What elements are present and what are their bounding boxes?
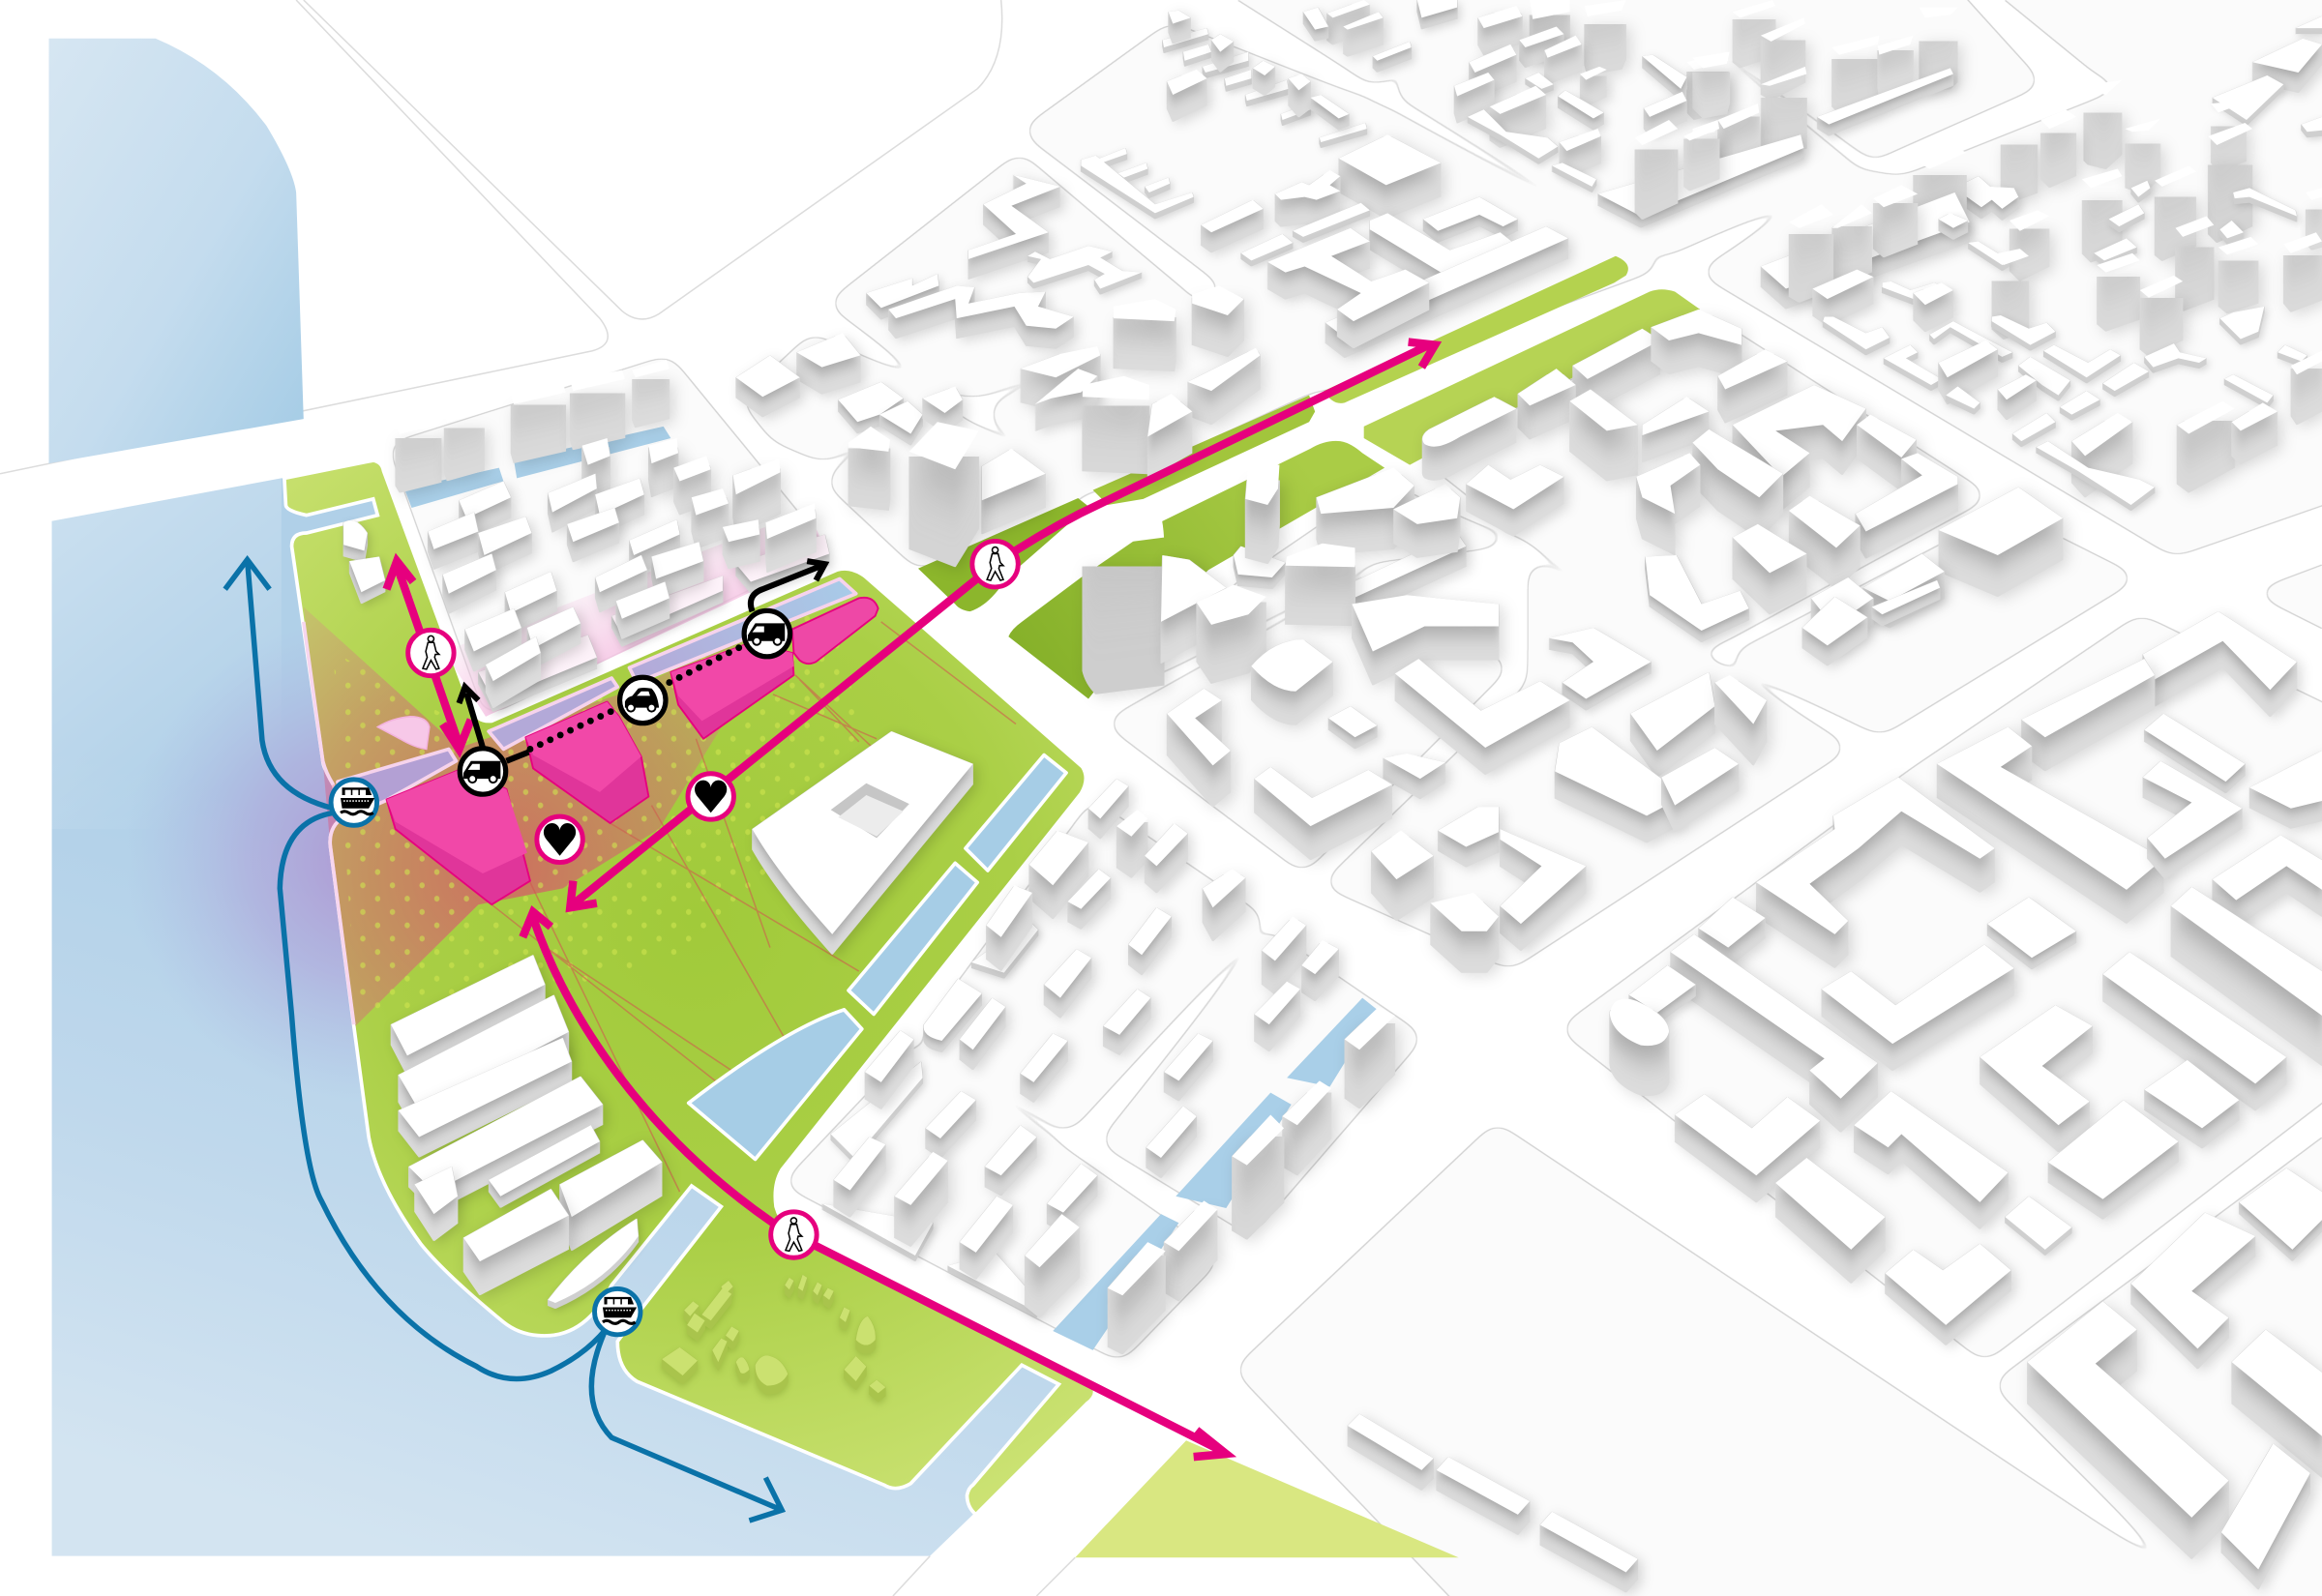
icon: van west bbox=[460, 749, 506, 794]
buildings: towers between park and canal bbox=[821, 779, 1395, 1312]
green strips along boulevard bbox=[918, 256, 1700, 698]
sightline network bbox=[491, 622, 1016, 1192]
park: south-east triangle bbox=[1075, 1440, 1459, 1557]
pink block 1 bbox=[386, 770, 530, 904]
icon: pedestrian boulevard bbox=[972, 541, 1018, 587]
residential ground tint bbox=[444, 511, 829, 717]
waterway: residential canals bbox=[404, 427, 1377, 1350]
pedestrian routes bbox=[386, 342, 1435, 1457]
route through residential edge bbox=[386, 561, 471, 749]
waterway: canal north bbox=[966, 755, 1066, 871]
water: lower river bbox=[52, 478, 1069, 1556]
icon: van east bbox=[744, 610, 790, 657]
pink block 3 bbox=[670, 642, 793, 739]
pink block 2 bbox=[525, 702, 648, 823]
shared link solid bbox=[506, 753, 528, 761]
icon: ferry south bbox=[595, 1288, 640, 1335]
pink stepping pebble bbox=[377, 717, 430, 749]
icon: ferry north bbox=[331, 780, 377, 825]
dotted activity field bbox=[333, 607, 874, 1021]
route north with arrow bbox=[225, 560, 333, 809]
buildings: courtyards south of boulevard bbox=[1167, 595, 1767, 931]
van route north-east bbox=[751, 561, 825, 611]
dotted shuttle line bbox=[530, 645, 743, 749]
waterway: tinted canals along pink blocks bbox=[338, 578, 856, 818]
southern route bbox=[522, 912, 1226, 1457]
route south with arrow bbox=[591, 1329, 782, 1521]
waterway: inlet lake bbox=[689, 1010, 862, 1159]
buildings: mid-rise blocks east of green strip bbox=[1422, 310, 2063, 631]
waterway: canal middle bbox=[848, 863, 977, 1014]
pink block 4 bbox=[792, 598, 878, 664]
buildings: eastern skyscraper cluster bbox=[1761, 16, 2322, 505]
buildings: mid district north of boulevard bbox=[736, 0, 1568, 500]
road edge lines bbox=[0, 0, 1075, 1596]
boulevard route bbox=[570, 342, 1435, 907]
pink activity blocks bbox=[386, 598, 878, 904]
water: upper river bbox=[49, 39, 304, 463]
buildings: central skyscraper cluster bbox=[1454, 0, 1957, 216]
parkland: riverside site bbox=[284, 460, 1095, 1515]
van route north bbox=[459, 687, 483, 748]
vehicle routes bbox=[459, 561, 825, 761]
icon: small car bbox=[620, 677, 666, 724]
lower park tree clusters bbox=[662, 1275, 885, 1393]
buildings: residential district by site bbox=[396, 360, 829, 700]
buildings: boulevard towers bbox=[1083, 463, 1466, 625]
tinted shoreline edge bbox=[304, 622, 354, 1024]
icon: heart on boulevard route bbox=[688, 774, 733, 819]
icon: heart by pink block bbox=[537, 816, 582, 863]
route along river bend bbox=[280, 813, 606, 1379]
icon: pedestrian north bbox=[408, 630, 454, 676]
influence fan overlay bbox=[304, 585, 837, 1026]
icon: pedestrian south bbox=[771, 1212, 817, 1257]
boat routes bbox=[225, 560, 782, 1521]
campus building with courtyard bbox=[753, 731, 973, 934]
buildings: south-east slab blocks bbox=[1348, 580, 2322, 1573]
peninsula warehouses bbox=[343, 520, 662, 1303]
